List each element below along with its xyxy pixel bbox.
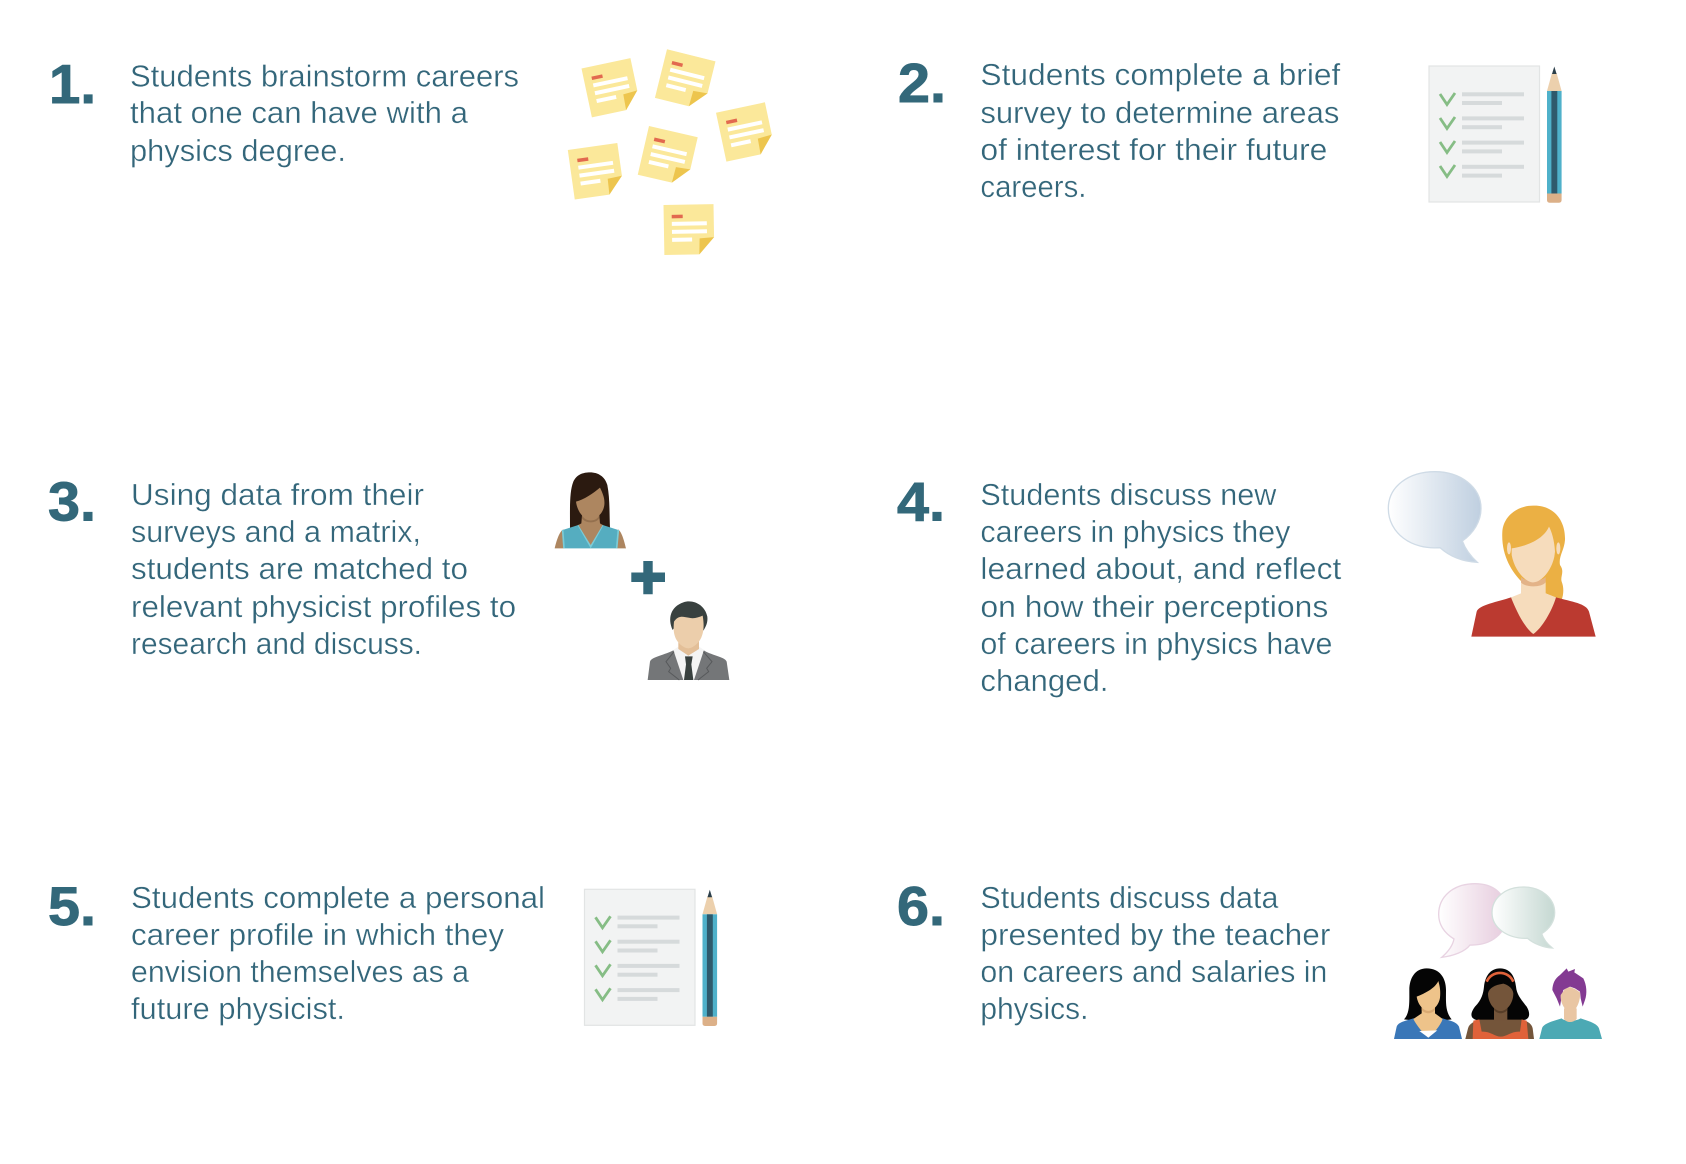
step 2 text <box>980 57 1341 204</box>
icon: plus sign <box>631 561 665 594</box>
step 4 text <box>980 477 1342 698</box>
step 2 number: 2. <box>898 52 946 114</box>
icon: woman with orange headband <box>1465 968 1534 1039</box>
step 5 text: career profile in which they <box>131 917 505 952</box>
step 1 number: 1. <box>49 53 96 115</box>
icon: checklist and pencil <box>1429 66 1562 203</box>
step 4 number: 4. <box>897 470 945 532</box>
step 2 text: survey to determine areas <box>980 95 1339 130</box>
step 4 text: of careers in physics have <box>980 626 1332 661</box>
step 2 text: Students complete a brief <box>980 57 1341 92</box>
step 6 text: presented by the teacher <box>980 917 1330 952</box>
step 3 text: surveys and a matrix, <box>131 514 421 549</box>
step 1 text: Students brainstorm careers <box>130 58 519 94</box>
icon: green speech bubble <box>1492 887 1555 948</box>
step 3 text: Using data from their <box>131 477 424 512</box>
icon: woman with dark hair <box>555 472 626 548</box>
step 1 text: that one can have with a <box>130 95 469 130</box>
icon: woman with black hair <box>1394 968 1462 1039</box>
icon: blonde woman <box>1471 506 1596 637</box>
step 6 number: 6. <box>897 875 945 937</box>
icon: man in suit <box>648 601 729 680</box>
step 5 text: envision themselves as a <box>131 954 470 989</box>
step 3 text: students are matched to <box>131 551 468 586</box>
step 1 text: physics degree. <box>130 133 346 168</box>
step 4 text: changed. <box>980 663 1108 698</box>
step 5 text: future physicist. <box>131 991 345 1026</box>
step 4 text: Students discuss new <box>980 477 1277 512</box>
step 5 text <box>131 880 545 1026</box>
step 3 number: 3. <box>48 470 96 532</box>
step 6 text: physics. <box>980 991 1088 1026</box>
icon: sticky notes <box>568 49 775 255</box>
step 5 number: 5. <box>48 875 96 937</box>
icon: checklist and pencil <box>584 889 717 1026</box>
step 2 text: of interest for their future <box>980 132 1327 167</box>
step 6 text: on careers and salaries in <box>980 954 1327 989</box>
step 3 text: research and discuss. <box>131 626 422 661</box>
step 6 text: Students discuss data <box>980 880 1279 915</box>
icon: person with purple hair <box>1539 968 1602 1039</box>
step 4 text: learned about, and reflect <box>980 551 1342 586</box>
icon: speech bubble <box>1388 472 1481 562</box>
step 4 text: careers in physics they <box>980 514 1291 549</box>
step 3 text: relevant physicist profiles to <box>131 589 516 624</box>
step 2 text: careers. <box>980 169 1086 204</box>
step 6 text <box>980 880 1330 1026</box>
step 1 text <box>130 58 519 168</box>
step 4 text: on how their perceptions <box>980 589 1328 624</box>
icon: pink speech bubble <box>1439 884 1507 957</box>
step 5 text: Students complete a personal <box>131 880 545 915</box>
step 3 text <box>131 477 516 661</box>
